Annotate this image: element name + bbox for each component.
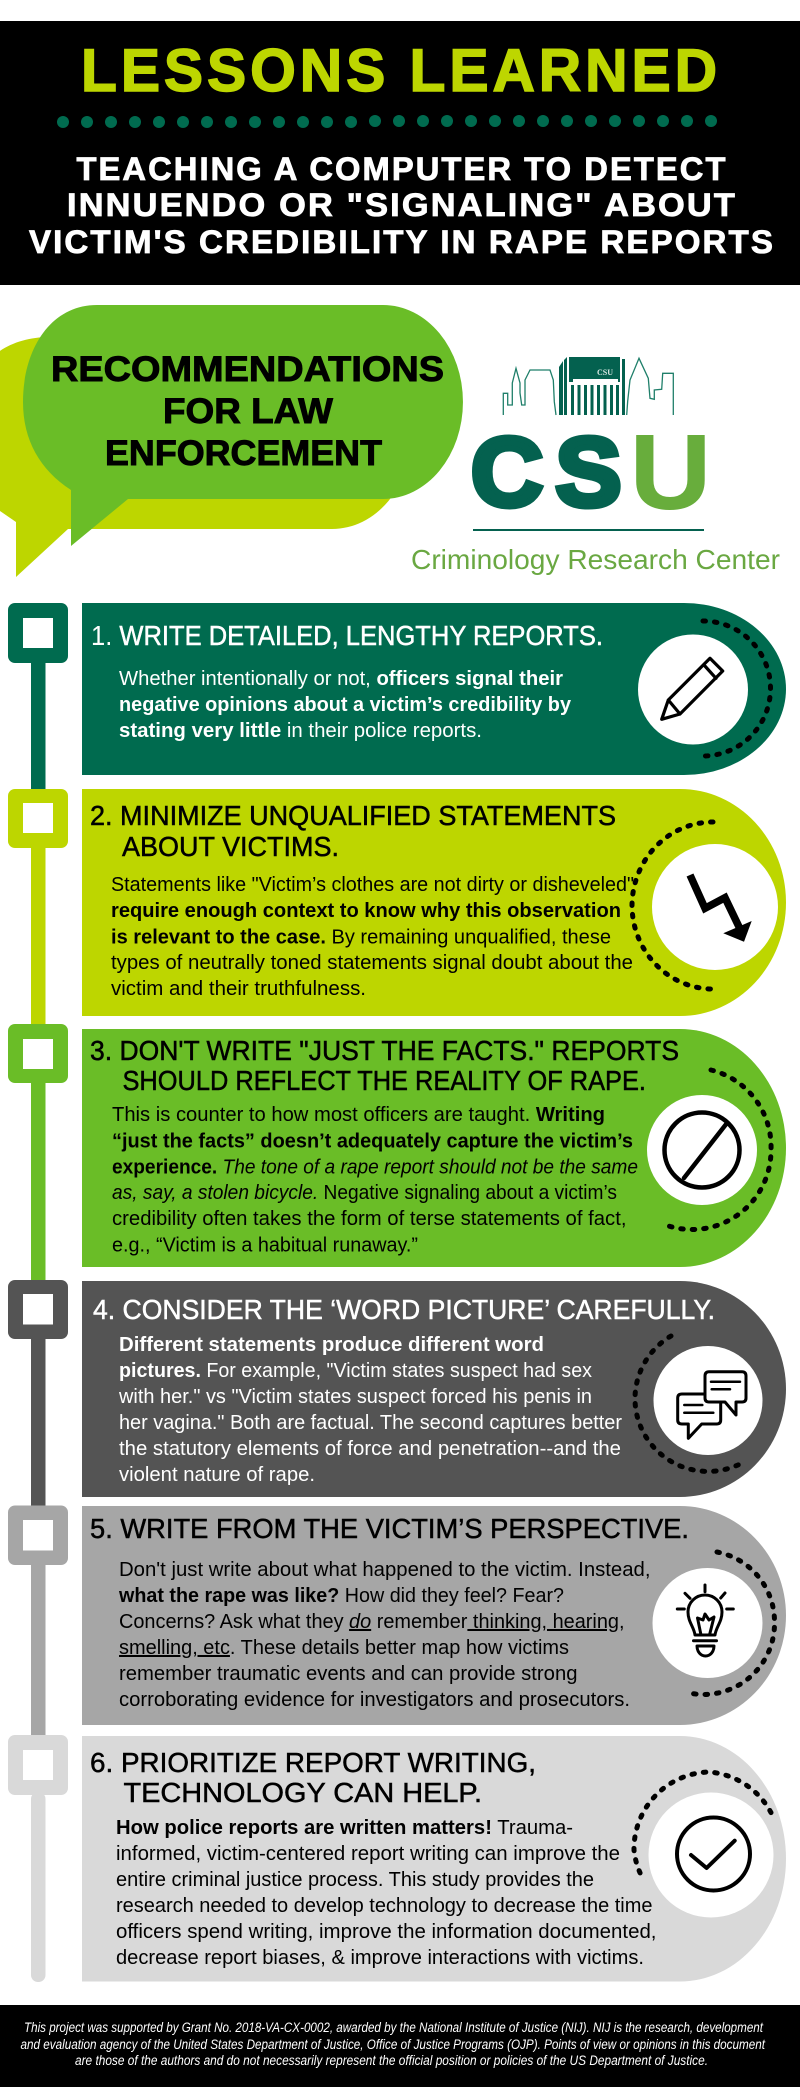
body 4: her vagina." Both are factual. The second captures better — [119, 1412, 622, 1434]
timeline node 4 — [8, 1280, 68, 1508]
skyline: CSU — [597, 368, 613, 377]
icon: light bulb — [652, 1552, 775, 1694]
body 5: corroborating evidence for investigators and prosecutors. — [119, 1689, 630, 1711]
timeline node 5 — [8, 1506, 68, 1737]
body 3: credibility often takes the form of terse statements of fact, — [112, 1208, 626, 1230]
icon: pencil — [638, 621, 770, 756]
front speech bubble — [23, 305, 463, 546]
body 4 — [118, 1334, 622, 1486]
body 4: violent nature of rape. — [119, 1464, 315, 1486]
body 6: entire criminal justice process. This study provides the — [116, 1869, 594, 1891]
CSU logo — [411, 357, 780, 575]
icon: prohibited sign — [647, 1070, 771, 1230]
body 6: How police reports are written matters! Trauma- — [116, 1817, 573, 1839]
panel: recommendation 2 — [82, 789, 786, 1016]
dotted divider — [57, 115, 717, 128]
body 4: pictures. For example, "Victim states suspect had sex — [119, 1360, 592, 1382]
body 6: officers spend writing, improve the information documented, — [116, 1921, 656, 1943]
panel: recommendation 6 — [82, 1736, 786, 1982]
subtitle: TEACHING A COMPUTER TO DETECT — [76, 151, 728, 187]
body 2: require enough context to know why this observation — [111, 900, 621, 922]
body 5: smelling, etc. These details better map how victims — [119, 1637, 569, 1659]
heading: recommendations: ENFORCEMENT — [105, 434, 382, 473]
body 6: decrease report biases, & improve interactions with victims. — [116, 1947, 644, 1969]
CSU letters: C — [471, 418, 543, 526]
heading 6: TECHNOLOGY CAN HELP. — [124, 1777, 482, 1808]
body 1: negative opinions about a victim’s credibility by — [119, 694, 572, 716]
body 4: with her." vs "Victim states suspect forced his penis in — [118, 1386, 592, 1408]
body 1 — [119, 668, 572, 742]
timeline node 6 — [8, 1735, 68, 1982]
panel: recommendation 5 — [82, 1506, 786, 1725]
body 6 — [116, 1817, 656, 1969]
heading: recommendations — [51, 350, 444, 473]
body 5: Concerns? Ask what they do remember thinking, hearing, — [119, 1611, 624, 1633]
CSU letters: U — [630, 414, 711, 532]
body 2 — [111, 874, 634, 1000]
body 3: “just the facts” doesn’t adequately capture the victim’s — [112, 1130, 633, 1152]
CSU letters — [471, 414, 711, 532]
funding disclaimer: are those of the authors and do not necessarily represent the official position or policies of the US Department of Justice. — [75, 2053, 708, 2068]
heading 5: 5. WRITE FROM THE VICTIM’S PERSPECTIVE. — [90, 1513, 689, 1544]
body 2: victim and their truthfulness. — [111, 978, 366, 1000]
heading 6 — [90, 1747, 536, 1808]
timeline node 3 — [8, 1024, 68, 1283]
logo caption: Criminology Research Center — [411, 544, 780, 575]
heading 3 — [90, 1035, 679, 1096]
body 3: experience. The tone of a rape report should not be the same — [112, 1156, 638, 1178]
body 3: e.g., “Victim is a habitual runaway.” — [112, 1234, 418, 1256]
subtitle: VICTIM'S CREDIBILITY IN RAPE REPORTS — [29, 224, 775, 260]
panel: recommendation 1 — [82, 603, 786, 775]
body 6: research needed to develop technology to decrease the time — [116, 1895, 652, 1917]
subtitle — [29, 151, 775, 260]
body 2: Statements like "Victim’s clothes are not dirty or disheveled" — [111, 874, 634, 896]
heading 2 — [90, 800, 616, 862]
icon: check mark — [634, 1772, 774, 1918]
body 5: remember traumatic events and can provide strong — [119, 1663, 578, 1685]
footer — [0, 2005, 800, 2087]
body 4: the statutory elements of force and penetration--and the — [119, 1438, 621, 1460]
title: LESSONS LEARNED — [81, 37, 721, 104]
timeline node 2 — [8, 789, 68, 1027]
back speech bubble — [0, 337, 412, 577]
heading 2: ABOUT VICTIMS. — [122, 831, 339, 862]
body 3 — [112, 1104, 638, 1256]
body 5: what the rape was like? How did they feel? Fear? — [118, 1585, 564, 1607]
body 2: types of neutrally toned statements signal doubt about the — [111, 952, 633, 974]
heading 1: 1. WRITE DETAILED, LENGTHY REPORTS. — [91, 620, 603, 651]
panel: recommendation 3 — [82, 1029, 786, 1267]
heading 2: 2. MINIMIZE UNQUALIFIED STATEMENTS — [90, 800, 616, 831]
body 6: informed, victim-centered report writing can improve the — [116, 1843, 620, 1865]
body 1: stating very little in their police reports. — [119, 720, 482, 742]
panel: recommendation 4 — [82, 1281, 786, 1497]
speech bubbles with heading — [0, 305, 463, 577]
body 1: Whether intentionally or not, officers signal their — [119, 668, 563, 690]
heading: recommendations: RECOMMENDATIONS — [51, 350, 444, 389]
body 5 — [118, 1559, 650, 1711]
CSU letters: S — [556, 418, 622, 526]
funding disclaimer — [20, 2020, 766, 2068]
skyline — [503, 357, 673, 415]
body 3: as, say, a stolen bicycle. Negative signaling about a victim’s — [112, 1182, 617, 1204]
body 3: This is counter to how most officers are taught. Writing — [112, 1104, 605, 1126]
heading 6: 6. PRIORITIZE REPORT WRITING, — [90, 1747, 536, 1778]
icon: zigzag down arrow — [632, 822, 778, 989]
body 2: is relevant to the case. By remaining unqualified, these — [111, 926, 611, 948]
timeline node 1 — [8, 603, 68, 791]
header banner — [0, 21, 800, 285]
body 4: Different statements produce different word — [119, 1334, 544, 1356]
heading: recommendations: FOR LAW — [163, 392, 333, 431]
icon: chat bubbles — [635, 1336, 762, 1471]
heading 3: 3. DON'T WRITE "JUST THE FACTS." REPORTS — [90, 1035, 679, 1066]
heading 4: 4. CONSIDER THE ‘WORD PICTURE’ CAREFULLY. — [93, 1294, 715, 1325]
heading 3: SHOULD REFLECT THE REALITY OF RAPE. — [122, 1065, 646, 1096]
body 5: Don't just write about what happened to the victim. Instead, — [119, 1559, 650, 1581]
subtitle: INNUENDO OR "SIGNALING" ABOUT — [67, 187, 737, 223]
